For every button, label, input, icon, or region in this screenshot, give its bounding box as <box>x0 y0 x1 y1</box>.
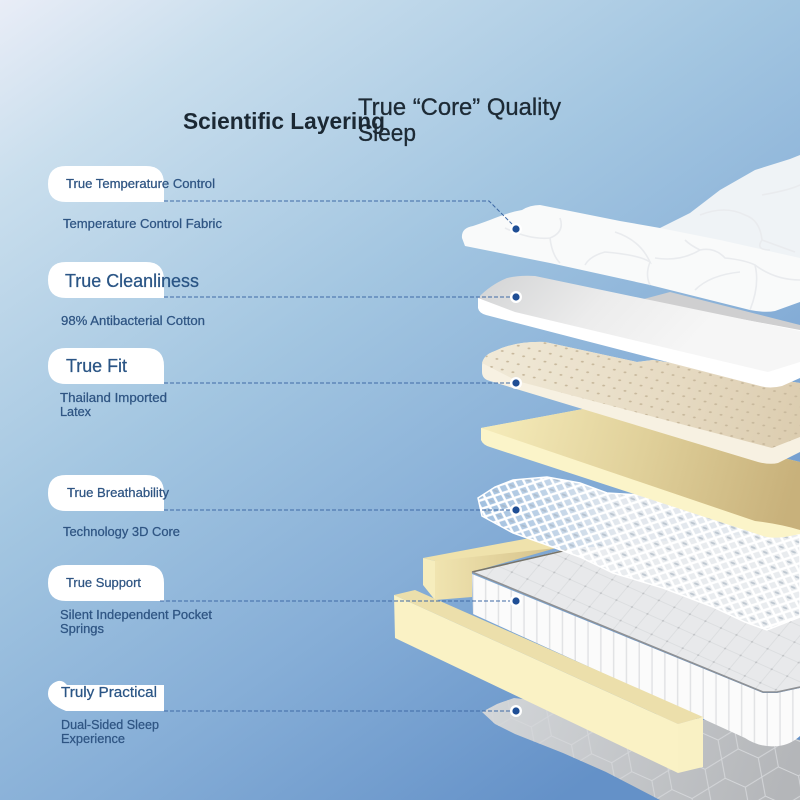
description: Thailand Imported <box>60 391 167 405</box>
item: True Temperature Control <box>48 166 522 235</box>
pill <box>48 348 164 384</box>
leader line <box>164 509 510 511</box>
front foam rail <box>394 590 703 773</box>
subtitle: True Core Quality Sleep: True “Core” Quality <box>358 94 561 121</box>
rear foam rail <box>423 538 556 600</box>
leader line <box>164 296 510 298</box>
subtitle: True Core Quality Sleep <box>358 94 561 147</box>
title: Scientific Layering: Scientific Layering <box>183 108 385 134</box>
pill <box>48 166 164 202</box>
subtitle: True Core Quality Sleep: Sleep <box>358 120 416 147</box>
heading: True Fit <box>66 356 127 376</box>
marker dot <box>510 377 522 389</box>
item: True Cleanliness <box>48 262 522 328</box>
leader line <box>164 382 510 384</box>
quilted pattern <box>505 185 800 310</box>
item: True Support <box>48 565 522 636</box>
layer 2: antibacterial cotton <box>478 276 800 388</box>
mattress layer stack illustration <box>394 155 800 800</box>
layer 3: Thailand latex <box>482 342 800 464</box>
marker dot <box>510 595 522 607</box>
description <box>60 391 167 419</box>
heading: True Cleanliness <box>65 271 199 291</box>
heading: True Temperature Control <box>66 177 215 191</box>
heading: True Support <box>66 576 142 590</box>
description <box>60 608 213 636</box>
heading: True Breathability <box>67 486 170 500</box>
description: Latex <box>60 405 92 419</box>
layer 4: 3D mesh core <box>478 477 800 630</box>
description <box>61 718 159 746</box>
description: Dual-Sided Sleep <box>61 718 159 732</box>
item: True Fit <box>48 348 522 419</box>
pill <box>48 681 164 711</box>
layer 6: dual-sided base <box>482 698 800 800</box>
description: Technology 3D Core <box>63 525 180 539</box>
description: Experience <box>61 732 125 746</box>
item: True Breathability <box>48 475 522 539</box>
pill <box>48 475 164 511</box>
layer 3b: yellow foam sheet <box>481 409 800 538</box>
marker dot <box>510 504 522 516</box>
marker dot <box>510 705 522 717</box>
layer 5: pocket spring unit <box>472 530 800 746</box>
leader line <box>160 600 510 602</box>
pill <box>48 262 164 298</box>
pill <box>48 565 164 601</box>
description: Temperature Control Fabric <box>63 217 222 231</box>
leader line <box>164 710 510 712</box>
leader line <box>164 201 512 224</box>
marker dot <box>510 291 522 303</box>
heading: Truly Practical <box>61 684 157 701</box>
marker dot <box>510 223 522 235</box>
item: Truly Practical <box>48 681 522 746</box>
description: 98% Antibacterial Cotton <box>61 314 205 328</box>
description: Silent Independent Pocket <box>60 608 213 622</box>
layer 1: temperature control fabric <box>462 155 800 312</box>
description: Springs <box>60 622 104 636</box>
